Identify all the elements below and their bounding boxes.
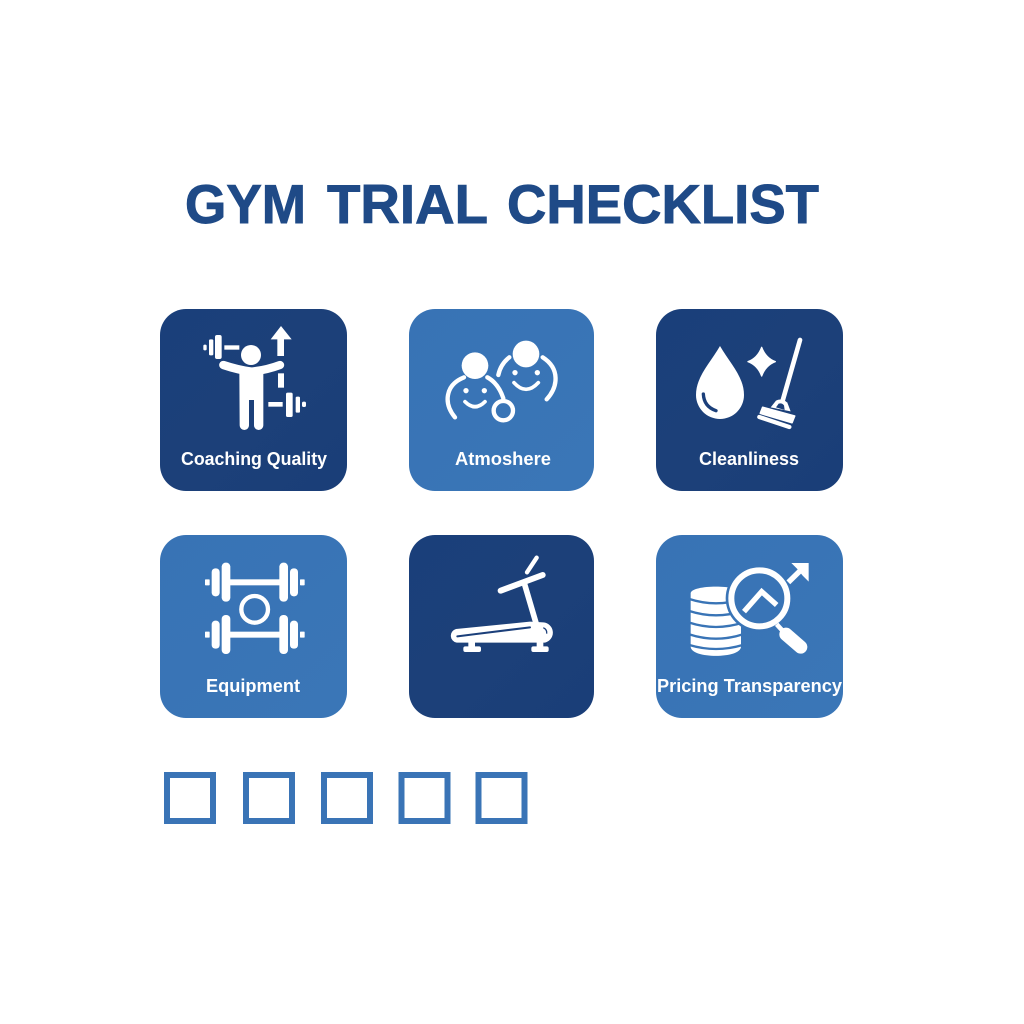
icon: two barbells and weight plate (205, 563, 305, 654)
label: cleanliness: Cleanliness (699, 449, 799, 469)
title: GYM (185, 173, 306, 235)
icon: two smiling people (448, 341, 556, 420)
panel: cleanliness (656, 309, 843, 491)
panel: treadmill (409, 535, 594, 718)
panel: coaching quality (160, 309, 347, 491)
label: coaching quality: Coaching Quality (181, 449, 327, 469)
icon: coach with dumbbells and arrow (203, 326, 306, 430)
icon: coin stack, magnifier and arrow (689, 563, 809, 656)
icon: treadmill (451, 558, 553, 652)
label: equipment: Equipment (206, 676, 300, 696)
icon: sparkle and mop (748, 340, 800, 427)
panel: atmosphere (409, 309, 594, 491)
title (185, 173, 819, 235)
label: pricing transparency: Pricing Transparency (657, 676, 842, 696)
panel: equipment (160, 535, 347, 718)
checkbox row (167, 775, 524, 821)
label: atmosphere: Atmoshere (455, 449, 551, 469)
title: TRIAL (327, 173, 488, 235)
panel: pricing transparency (656, 535, 843, 718)
title: CHECKLIST (507, 173, 819, 235)
icon: water drop (696, 346, 744, 419)
